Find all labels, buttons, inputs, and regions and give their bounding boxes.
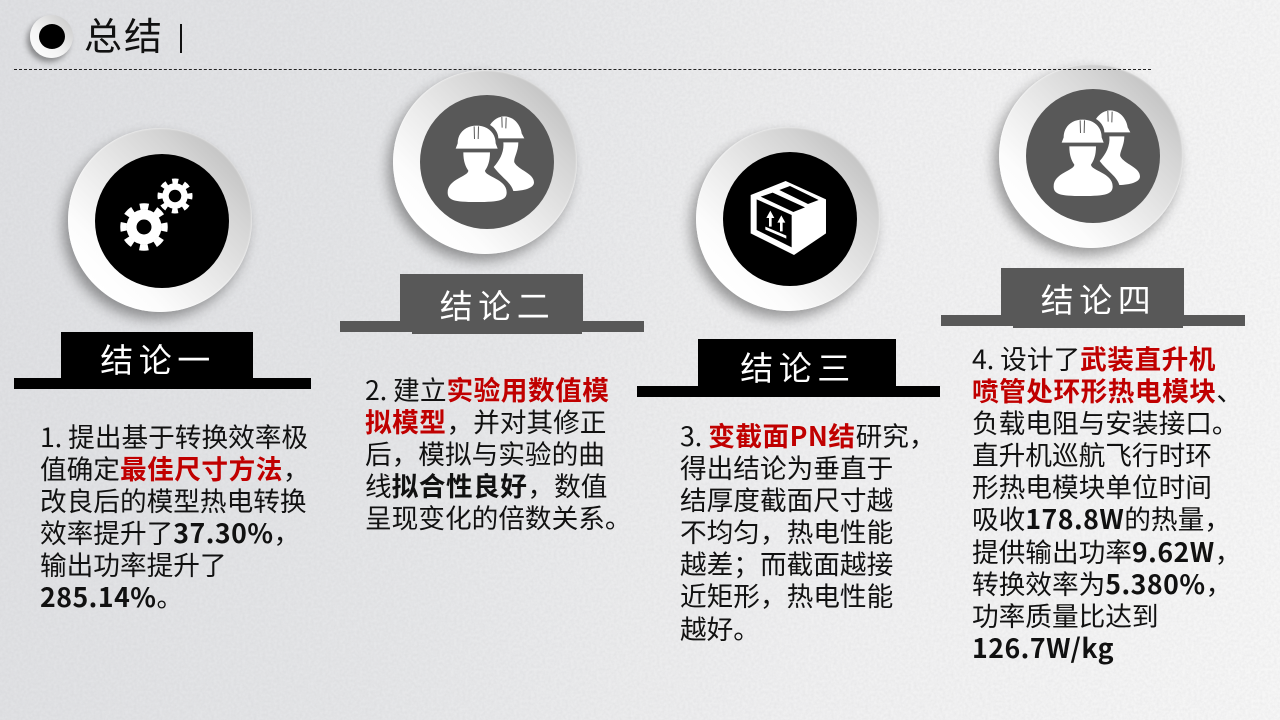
text block: 输出功率提升了 [40, 544, 227, 583]
icon: workers [999, 64, 1183, 248]
text block: 得出结论为垂直于 [680, 447, 893, 486]
header [24, 16, 182, 66]
text block: 值确定最佳尺寸方法， [40, 448, 310, 487]
heading [698, 339, 896, 386]
text block: 4. 设计了武装直升机 [972, 338, 1216, 377]
text block: 后，模拟与实验的曲 [365, 433, 605, 472]
text block: 线拟合性良好，数值 [365, 465, 607, 504]
text block: 提供输出功率9.62W， [972, 531, 1241, 570]
text block: 285.14%。 [40, 576, 183, 615]
heading [400, 274, 583, 321]
text block: 转换效率为5.380%， [972, 563, 1232, 602]
text block: 越差；而截面越接 [680, 543, 893, 582]
text block: 直升机巡航飞行时环 [972, 434, 1212, 473]
text block: 结厚度截面尺寸越 [680, 479, 893, 518]
heading: 结论三 [740, 350, 856, 386]
text block: 效率提升了37.30%， [40, 512, 300, 551]
icon: gears [68, 128, 252, 312]
text block: 3. 变截面PN结研究， [680, 415, 936, 454]
text block: 2. 建立实验用数值模 [365, 369, 609, 408]
text block: 功率质量比达到 [972, 595, 1159, 634]
text block: 拟模型，并对其修正 [365, 401, 606, 440]
panel: conclusion one [14, 128, 311, 615]
panel: conclusion three [637, 126, 940, 647]
text block [365, 369, 632, 536]
dashed rule [14, 69, 1151, 70]
heading bar [340, 321, 644, 332]
panel: conclusion four [941, 63, 1245, 666]
heading: 结论二 [440, 288, 555, 324]
text block: 近矩形，热电性能 [680, 575, 893, 614]
icon: workers [393, 70, 577, 254]
heading underlay [412, 332, 582, 334]
heading bar [637, 386, 940, 397]
text block [680, 415, 936, 647]
text block [972, 338, 1243, 666]
heading [1001, 268, 1184, 315]
text block [40, 416, 310, 615]
text block: 改良后的模型热电转换 [40, 480, 307, 519]
heading: 结论一 [100, 342, 216, 379]
text block: 喷管处环形热电模块、 [972, 370, 1243, 409]
text block: 形热电模块单位时间 [972, 466, 1212, 505]
title: 总结 [84, 17, 164, 59]
text block: 126.7W/kg [972, 627, 1114, 666]
header bullet icon [30, 15, 73, 58]
text block: 不均匀，热电性能 [680, 511, 893, 550]
text block: 负载电阻与安装接口。 [972, 402, 1239, 441]
text block: 吸收178.8W的热量， [972, 498, 1231, 537]
text block: 呈现变化的倍数关系。 [365, 497, 632, 536]
text block: 1. 提出基于转换效率极 [40, 416, 308, 455]
heading bar [941, 315, 1245, 326]
heading bar [14, 378, 311, 389]
panel: conclusion two [340, 69, 644, 536]
heading: 结论四 [1041, 282, 1156, 318]
text block: 越好。 [680, 608, 760, 647]
icon: box [696, 127, 880, 311]
heading underlay [1013, 326, 1183, 328]
heading [61, 332, 253, 378]
title divider mark [180, 24, 182, 53]
